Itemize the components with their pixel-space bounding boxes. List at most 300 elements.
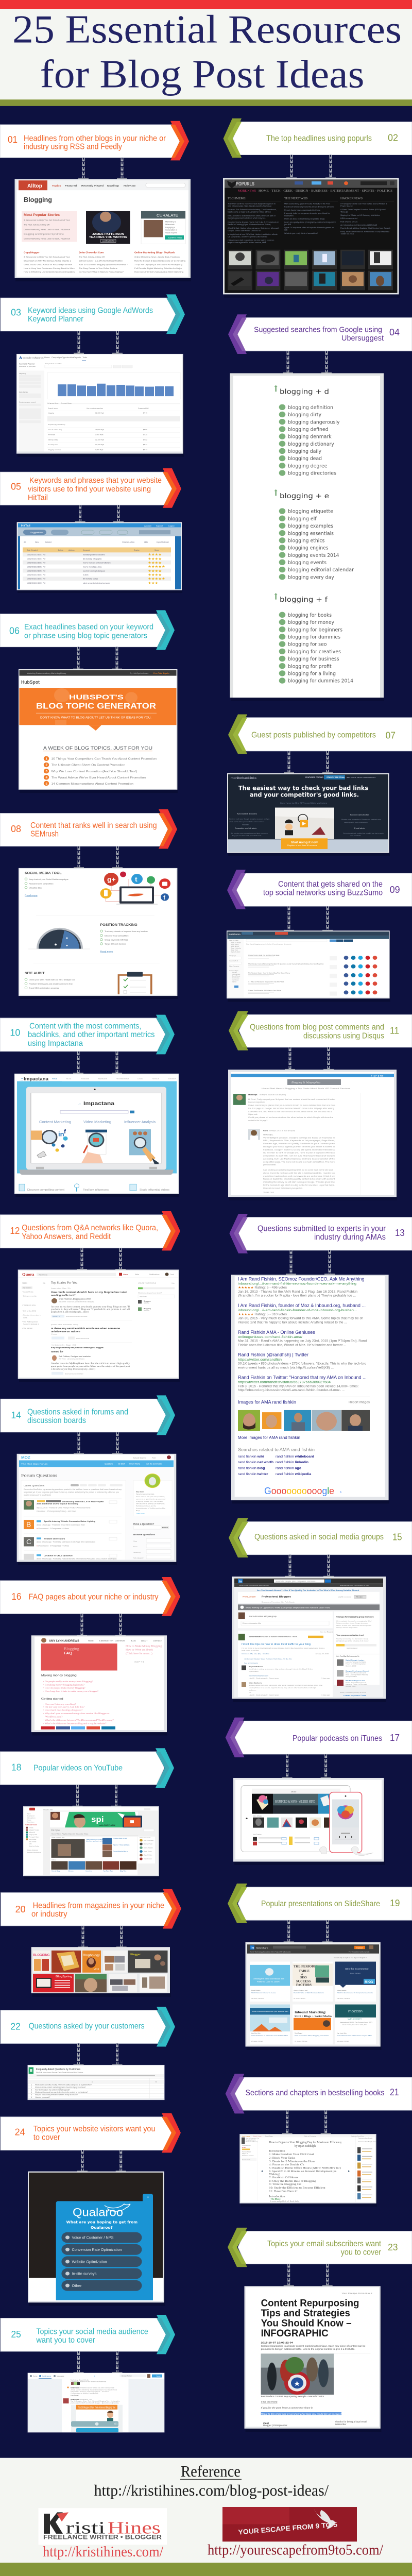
hubspot topics list: The Ultimate Cheat Sheet On Content Promotion [52, 764, 126, 767]
moz question list: Sep 22, 2015 - Posted by Chris Young in Feature Announcements [37, 1507, 91, 1509]
most popular stories: 3 Resources to Help You Get Smart about Your [24, 219, 71, 221]
keyword list: blogging + e: blogging events [288, 560, 327, 566]
moz blue bar: Questions [105, 1463, 113, 1465]
slideshare header [247, 1944, 379, 1954]
banner 02: The top headlines using popurls [266, 134, 372, 143]
twitter top nav [28, 2373, 164, 2379]
quora feed: If my blog is relatively new, how can I attract guest bloggers [51, 1347, 104, 1349]
ad: James Patterson: JAMES PATTERSON [92, 233, 124, 236]
second comment: competition: to start with. I am not sure what keyword research tool you [263, 1155, 335, 1157]
monitorbacklinks features: they get new links with your SEO tools [232, 835, 262, 837]
moz right sidebar: to sign up for Moz Pro. You can also [136, 1500, 163, 1502]
screen 02: popurls [223, 178, 400, 298]
impactana nav: TESTIMONIALS [116, 1078, 129, 1080]
kindle toolbar: Book Cover [253, 2136, 262, 2137]
ad: Curalate: Visual Buyers [165, 232, 177, 234]
blog top bar: f t g+ p rss [371, 1075, 384, 1078]
banner 13: industry during AMAs [314, 1233, 386, 1242]
magazine row 1: Blogger [130, 1953, 141, 1956]
title: for Blog Post Ideas [40, 52, 364, 96]
newsletter footer text: Blogger | Entrepreneur [263, 2424, 287, 2427]
linkedin right column: Asst. Learning Master Planning [346, 1674, 369, 1675]
quora feed: Downvote Comment Share [65, 1373, 83, 1375]
result 5: Feb 3, 2015 - Honored that my AMA on Inbound has been viewed 14,000+ times: [238, 1385, 359, 1388]
kindle right panel: Customers Also Bought Items [358, 2141, 376, 2143]
quora right column [138, 1282, 175, 1312]
result 2: I Am Rand Fishkin, founder of Moz & Inbound.org, husband ... [238, 1303, 366, 1309]
banner 05 [0, 468, 181, 508]
slideshare card 1: SEO Patterns to Love vs. Leave [251, 1992, 276, 1994]
kindle right panel: ▸ [348, 2170, 350, 2173]
hittail keywords table: ★★★★★ [148, 577, 165, 581]
buzzsumo search [246, 939, 353, 945]
slideshare card 6: International SEO & The Future of your SEO [340, 2022, 372, 2024]
banner 01 [0, 121, 189, 160]
linkedin right column: abuse. To read more about how we've improved [336, 1624, 371, 1626]
alltop columns: The Rich Jerk is Jerking Off [79, 256, 105, 258]
magazine row 2 [33, 1974, 167, 1992]
result 2: inbound.org/.../i-am-rand-fishkin-founder-of-moz-inbound-org-husban... [238, 1309, 357, 1312]
buzzsumo sidebar: Country/TLD [229, 960, 238, 962]
popurls columns: Rust in Detail: Writing Scalable Chat Service from Scratch [340, 227, 390, 229]
buzzsumo results [248, 954, 337, 996]
slideshare card 5: Inbound Marketing: [295, 2011, 327, 2014]
semrush site audit [25, 916, 160, 989]
banner 08: Content that ranks well in search using [30, 821, 157, 830]
moz right sidebar: comment, or give thumbs up, you need [136, 1498, 165, 1500]
screen 07: Monitor Backlinks [227, 773, 390, 856]
qualaroo question: What are you hoping to get from [66, 2220, 138, 2225]
popurls thumbnails row 1 [228, 250, 393, 269]
faq: getting started [41, 1697, 114, 1725]
banner 12: Questions from Q&A networks like Quora, [22, 1224, 158, 1232]
quora left column: • The Martian [22, 1327, 32, 1329]
banner 16: FAQ pages about your niche or industry [29, 1592, 159, 1601]
buzzsumo results: The Absolute Guide - How To Start a Blog That Makes Money [248, 972, 290, 974]
adwords sidebar: Customize your search [19, 401, 36, 403]
banner 22: 22 [10, 2022, 21, 2032]
hittail keywords table: ★★★★ [148, 561, 162, 565]
monitorbacklinks features: backlinks [242, 824, 249, 825]
linkedin start discussion: Enter a discussion title [243, 1622, 261, 1624]
impactana nav [20, 1076, 176, 1082]
popurls columns: just $29 [284, 224, 291, 226]
sheets rows: What analytics would you use to develop better content for my business? [35, 2091, 88, 2093]
result 1: @randfish. I'm a sucker for Maptia - love their plans :-) They're probably too ... [238, 1294, 356, 1298]
screen 17: iTunes on iPad and iPod [233, 1778, 385, 1865]
popurls columns: TECHMEME [228, 197, 246, 200]
popurls columns: Power Source [340, 205, 353, 207]
banner 05: HitTail [28, 494, 48, 502]
youtube related channels: Rand Fishkin [144, 1854, 152, 1856]
youtube sidebar: Watch Later [27, 1821, 35, 1823]
popurls columns: Filthy, Mean and Powerful: How Donald Trump Mastered [340, 231, 389, 232]
banner 23: Topics your email subscribers want [267, 2240, 381, 2248]
second comment: much time tracking how well my keywords are performing. I think if we [263, 1175, 335, 1177]
hittail keywords table: Deleted [45, 541, 52, 543]
hittail keywords table: Actions [68, 549, 75, 551]
banner 09: Content that gets shared on the [278, 880, 383, 889]
newsletter headline: INFOGRAPHIC [261, 2328, 329, 2338]
banner 15: Questions asked in social media groups [254, 1533, 384, 1541]
hubspot orange hero: BLOG TOPIC GENERATOR [36, 702, 156, 710]
youtube sidebar: Just Trends [29, 1841, 37, 1843]
linkedin posts: I'm not trying to be an internationally known blogger, but I'd like how to find local readers and draw a [242, 1647, 324, 1649]
ad: Curalate: Marketing to [165, 221, 176, 223]
slideshare header: SlideShare [256, 1946, 268, 1949]
keyword list: blogging + d [274, 385, 339, 476]
kindle book text: 5: Establish Home Office Hours (Allow NOBODY in!) [269, 2166, 341, 2170]
moz right sidebar: Participate in Q&A, and by [136, 1505, 156, 1507]
moz right sidebar: Hey there! [136, 1491, 144, 1493]
banner 21: 21 [390, 2088, 399, 2098]
popurls columns: merger agreement with Dell, which may be... [228, 217, 266, 219]
quora top bar: Notifications [149, 1274, 160, 1276]
amy lynn nav: E-NEWSLETTER [99, 1640, 114, 1642]
slideshare header: Home Technology Education More Topics My Clipboards [250, 1951, 291, 1953]
kindle left panel: Maximum Efficiency [246, 2141, 259, 2143]
ad: Curalate: LEARN NOW [168, 236, 182, 239]
popurls columns: Pixels all about to start taking 3D printed drugs [284, 218, 325, 220]
keyword list: blogging + d: blogging dead [288, 456, 322, 462]
keyword list: blogging + e: blogging elf [288, 516, 317, 522]
alltop columns: Good, Good, Good Advice for Recording Interview [24, 263, 72, 265]
popurls columns: In-depth look at how EU's Safe Harbor invalidation affects [228, 233, 278, 235]
banner 23: 23 [388, 2243, 398, 2253]
twitter feed column: Marketing · Social Media [71, 2379, 89, 2381]
alltop nav: Topics [52, 184, 61, 188]
result 1: I Am Rand Fishkin, SEOmoz Founder/CEO, Ask Me Anything [238, 1277, 365, 1282]
banner 04: Ubersuggest [341, 334, 384, 343]
monitorbacklinks headline: Must have tool for SEOs and Web Marketers [280, 802, 328, 805]
hubspot topics list: 2 [45, 764, 48, 767]
hubspot top bar: Try HubSpot software [130, 672, 149, 674]
quora left column [22, 1282, 45, 1329]
twitter feed column: Like Social [71, 2395, 79, 2397]
hittail keywords table: ★★★★ [148, 573, 162, 577]
earbuds [319, 1846, 373, 1856]
slideshare card 5 [293, 2005, 333, 2044]
impactana screen content: Video Marketing [83, 1120, 111, 1124]
banner 09: top social networks using BuzzSumo [263, 888, 383, 897]
banner 03: Keyword Planner [28, 314, 84, 324]
hittail keywords table: 10/02/2015 2:50:51 PM [27, 558, 46, 560]
screen 11: blog comments [228, 1070, 397, 1200]
moz question list: responses yet. If your response gets three thumbs up, marked as helpful by the poster, or endorsed by a Mozzer, you [24, 1492, 119, 1494]
keyword list: blogging + d: blogging definition [288, 404, 333, 411]
moz forum heading: Forum Questions [21, 1473, 58, 1478]
hittail keywords table: how to monetize a blog [83, 566, 101, 568]
quora feed: As soon as you have content, you should promote your blog. Blogs are not "If [51, 1306, 130, 1308]
twitter feed column: Contributor, Tagged me as Twitter Lists/Hashtags [71, 2381, 107, 2383]
keyword list: blogging + f: blogging for dummies 2014 [288, 678, 353, 684]
youtube sidebar: My Channel [27, 1815, 35, 1817]
result 3: Mar 31, 2015 - Rand's AMA is happening on July 23rd, 2015 (1pm PT/4pm Est). Rand [238, 1340, 367, 1343]
buzzsumo sidebar: Past Month [231, 945, 239, 947]
linkedin right column: participants get all the full value of all of your. [336, 1640, 369, 1642]
qualaroo options: Voice of Customer / NPS [72, 2235, 114, 2240]
slideshare card 4: Good Practices to Maximize your Website SEO [252, 2010, 288, 2012]
hubspot orange hero [20, 688, 176, 731]
adwords results table: $6.71 [143, 444, 147, 446]
monitorbacklinks button: Register in less than 30 seconds [287, 844, 317, 846]
result 4: environment hurts us all so much (via http://t.co/aesYeGjX8) ... [238, 1366, 334, 1370]
semrush site audit: Track SEO optimization progress [29, 987, 59, 989]
slideshare card 5: TechTarget [295, 2032, 302, 2034]
slideshare card 3: SEO for Ecommerce: A Comprehensive Guide [337, 1992, 373, 1994]
result 2: ★★★★★ Rating: 5 - 310 votes [238, 1312, 287, 1316]
adwords search: Keyword Planner [19, 363, 35, 365]
linkedin top bar: in [238, 1580, 242, 1583]
twitter top nav: Tweet [156, 2375, 161, 2377]
keyword list: blogging + d: blogging + d [280, 388, 329, 396]
screen 10: Impactana [14, 1074, 179, 1197]
linkedin posts: January 26, 2015 [315, 1653, 329, 1655]
monitorbacklinks features: rankings with your competitors [344, 821, 368, 823]
newsletter footer text [261, 2395, 367, 2427]
slideshare card 3 [335, 1962, 376, 2002]
kindle left panel: Blogging Day for [246, 2139, 256, 2141]
chains 15 [285, 1555, 334, 1577]
slideshare card 1 [250, 1962, 290, 2002]
sheets rows: 3 [31, 2089, 32, 2091]
chains 21 [282, 2110, 331, 2134]
keyword list: blogging + f: blogging for seo [288, 641, 327, 648]
moz question list: about 4 hours ago · Posted by Federal Benefits Informational Advocates (SEO, Search Strategies) [37, 1558, 116, 1560]
alltop columns: 7 Tips For Deploying a Successful Ad Retargeting [134, 263, 182, 265]
linkedin start discussion: Start a discussion with your group [249, 1616, 277, 1618]
slideshare card 5: SEO + Blogs + Social Media [295, 2015, 332, 2018]
ipad: Music [291, 1791, 297, 1793]
keyword list: blogging + f: blogging for a living [288, 671, 336, 676]
twitter feed column: youtescapefrom9to5.com/top-26-blogger... @youtstream @pankaj [71, 2402, 118, 2404]
moz right sidebar: Sub-category [133, 1557, 144, 1559]
chains 25 [73, 2351, 123, 2373]
kindle book text: by Ryan Biddulph [295, 2144, 316, 2148]
linkedin posts: Engage people from your community, offer social "rewards" for sharing your pitches, go on local [249, 1684, 322, 1686]
banner 24: to cover [33, 2133, 60, 2142]
banner 07 [228, 715, 412, 754]
quora top bar: Quora [22, 1272, 35, 1277]
reference url: http://kristihines.com/blog-post-ideas/ [94, 2482, 329, 2499]
linkedin right column: Ads You May Be Interested In [336, 1655, 359, 1657]
quora feed: Downvote Comments 30 Share [66, 1315, 88, 1317]
ipad albums [253, 1815, 331, 1845]
quora right column: UPDATE YOUR PROFILE [138, 1282, 156, 1284]
semrush social media tool text: Keep track of your Social Media campaigns [29, 878, 68, 880]
second comment: I am working on articles regarding SEO, so do come back to the site and [263, 1169, 333, 1171]
youtube header: blogging bad [43, 1808, 53, 1810]
second comment: green the better. [263, 1164, 277, 1166]
buzzsumo sidebar [228, 939, 244, 997]
youtube sidebar: Wish List Online [29, 1845, 40, 1848]
youtube related channels: Amy Porterfield [144, 1839, 154, 1841]
moz question list: B [26, 1521, 31, 1528]
youtube sidebar: History [27, 1819, 31, 1821]
youtube video list: Demos [68, 1870, 74, 1872]
logo: Your Escape From 9 to 5: YOUR ESCAPE FROM 9 TO 5 [238, 2521, 338, 2536]
slideshare card 2: of [301, 1974, 303, 1976]
linkedin group header [238, 1592, 380, 1603]
qualaroo logo: Qualaroo [73, 2206, 123, 2219]
slideshare header: Upload [356, 1947, 363, 1949]
keyword list: blogging + e: blogging every day [288, 574, 334, 580]
keyword list: blogging + f: blogging for dummies [288, 634, 340, 640]
kindle book text: The Blaze [270, 2198, 281, 2200]
banner 01: industry using RSS and Feedly [24, 142, 123, 151]
amy lynn side links: (Click here for more...) [126, 1652, 152, 1655]
popurls columns: Three.js) [340, 211, 348, 213]
hittail keywords table [23, 541, 171, 585]
second comment: focus on backlinks, providing quality content & be smart with content [263, 1178, 335, 1180]
popurls columns: Twitter for 2016 [340, 233, 354, 235]
adwords header: Reports [74, 357, 81, 359]
newsletter footer text: Reply to this email and let us know what topic you would like us to cover! [261, 2413, 341, 2416]
related searches [238, 1447, 315, 1476]
alltop columns: Rule the School: 3 Essential Lessons on Co-Creating [134, 260, 185, 262]
adwords results table: blogging websites [48, 449, 61, 451]
popurls columns: Google, others saw Model Clauses for [228, 230, 261, 232]
moz right sidebar [133, 1474, 172, 1559]
hittail keywords table: ★★★★ [148, 557, 162, 561]
popurls columns: THE NEXT WEB [284, 197, 307, 200]
quora top bar: Home [123, 1274, 128, 1276]
screen 14: Moz Q&A forum [17, 1454, 177, 1565]
moz right sidebar: Sorted by [133, 1551, 141, 1553]
youtube sidebar: Home [27, 1813, 31, 1815]
second comment: Hi Monidipa, [263, 1134, 273, 1136]
banner 06 [0, 610, 175, 650]
moz question list: Announcing Multiseat 1.0 for Moz Pro (aka [62, 1500, 104, 1503]
keyword list: blogging + f: blogging for creatives [288, 649, 341, 655]
adwords results table: Keyword ideas [61, 402, 72, 404]
sheets rows: 6 [31, 2096, 32, 2098]
adwords results table: 1,900 High [95, 449, 104, 451]
semrush social icons: t [135, 876, 138, 883]
second comment: competition page. The more red means too much competition. The more [263, 1161, 335, 1163]
banner 10: using Impactana [28, 1039, 83, 1048]
slideshare card 2: Search Engine Land [294, 1990, 307, 1991]
magazine row 1: Bloghology [83, 1954, 100, 1957]
chains 14 [74, 1432, 123, 1454]
linkedin posts: 3 days ago [321, 1694, 330, 1696]
sheets rows: What are some content marketing goals I should be trying to achieve? [35, 2087, 86, 2089]
hittail keywords table: 10/02/2015 2:50:51 PM [27, 570, 46, 572]
result 4: https://twitter.com/randfish [238, 1358, 282, 1362]
keyword list: blogging + d: blogging directories [288, 470, 336, 476]
impactana illustration: content: in [58, 1131, 64, 1138]
keyword list: blogging + e: blogging ethics [288, 538, 324, 544]
faq: making money blogging: • Do people really make money from Blogging? [43, 1681, 93, 1683]
youtube sidebar: KTB [29, 1843, 32, 1845]
linkedin right column [334, 1612, 380, 1697]
monitorbacklinks button: Start using it now [291, 841, 318, 844]
result 4: Rand Fishkin (@randfish) | Twitter [238, 1352, 309, 1358]
youtube sidebar: Browse channels [27, 1849, 38, 1851]
banner 22: Questions asked by your customers [29, 2022, 145, 2030]
quora feed: How much content should I have on my blog before I start [51, 1291, 127, 1294]
linkedin top bar: Search for people, jobs, companies, and more... [276, 1581, 317, 1582]
result 1 [238, 1277, 365, 1298]
alltop heading: Blogging [24, 196, 52, 204]
popurls columns: China issues draft regulations for ride hailing services, [228, 240, 274, 242]
reference heading: Reference [181, 2463, 241, 2480]
result 3: Rand Fishkin AMA - Online Geniuses [238, 1330, 315, 1335]
linkedin posts: etc [249, 1691, 251, 1693]
qualaroo question [66, 2220, 138, 2230]
slideshare card 6: WELCOME! [348, 2018, 362, 2021]
alltop columns: How Does Intertice's Nana Abada Meet Marketing [134, 270, 183, 273]
banner 03 [1, 294, 185, 334]
quora feed: Question asked · Social Media · 30 Sep [51, 1324, 78, 1326]
linkedin posts: Milan Stankovic [249, 1682, 262, 1684]
amy lynn nav: CONTACT [153, 1640, 162, 1642]
chains 09 [284, 906, 333, 930]
kindle book text: 4: Focus on the Double C's [269, 2163, 304, 2166]
popurls columns: new Chromecasts (Sam MacNeuron/Ars Technica) [228, 205, 271, 207]
quora feed: 750 Views · Upvoted by Jean Shapira [59, 1358, 84, 1360]
ad: Curalate: Millennials: [165, 224, 175, 226]
youtube related channels: Michael Hyatt [144, 1843, 152, 1845]
youtube sidebar: Allegory Hall [29, 1834, 37, 1836]
linkedin group header: 12,275 members [338, 1596, 351, 1598]
newsletter footer text: Best Modern Content Repurposing example - Marvel Comics [261, 2395, 324, 2398]
screen 21: Kindle book preview [239, 2134, 377, 2207]
quora feed: Upvote | 78 [53, 1315, 61, 1317]
first comment: Could you please let me know what are the other factors for which Google will show the [248, 1116, 333, 1118]
moz blue bar: My Stuff [118, 1463, 125, 1465]
sheets rows: 2 [31, 2087, 32, 2089]
monitorbacklinks features: Auto backlink discovery [237, 813, 257, 815]
alltop columns: Brian Clark on Why Not Being a Techie May Be a [24, 260, 72, 262]
keyword list: blogging + f: blogging for profit [288, 664, 332, 669]
sheets rows [28, 2078, 164, 2099]
quora left column: • The Walking Dead [22, 1321, 38, 1323]
sheets rows: 4 [31, 2091, 32, 2093]
hittail keywords table: Hide [144, 541, 148, 543]
adwords header [19, 356, 87, 361]
banner 20: Headlines from magazines in your niche [33, 1901, 164, 1910]
screen 18: YouTube channel [23, 1806, 160, 1879]
related searches: rand fishkin age [276, 1467, 301, 1470]
magazine row 1: Vera [94, 1968, 99, 1971]
popurls columns: US companies, and three primary alternatives [228, 236, 267, 238]
screen 20: magazines [31, 1947, 171, 1997]
sheets title [29, 2067, 164, 2077]
chains 08 [74, 846, 123, 868]
youtube sidebar: SUBSCRIPTIONS [25, 1824, 37, 1826]
quora feed: guest posts from people in your niche. Make sure the subject of the guest post [51, 1365, 130, 1367]
popurls columns: 8 speedy, indie horror games to curdle your blood for [284, 212, 330, 214]
quora right column: Hide [171, 1282, 175, 1284]
banner 11: 11 [390, 1026, 399, 1036]
impactana feature row: Find key influencers [83, 1189, 109, 1192]
quora feed: unfollow me on Twitter? [51, 1330, 80, 1333]
youtube related channels: Marie Forleo [144, 1851, 152, 1852]
kindle toolbar: Settings Font Print [351, 2136, 364, 2137]
hittail keywords table: 10/02/2015 2:50:51 PM [27, 582, 46, 584]
alltop columns: Copyblogger [24, 251, 40, 254]
youtube video list: Tools Website How to [113, 1851, 128, 1852]
popurls columns: What do you really think of wearables? [284, 232, 318, 234]
monitorbacklinks button [281, 838, 328, 849]
logo: Kristi Hines [38, 2508, 167, 2545]
kindle right panel: ◂ [261, 2170, 263, 2173]
result 1: inbound.org/.../i-am-rand-fishkin-seomoz-founder-ceo-ask-me-anything [238, 1282, 356, 1286]
banner 05: visitors use to find your website using [28, 485, 151, 494]
second comment: So in order to rank in Google you have to pick a keyword with less [263, 1152, 335, 1154]
slideshare card 2: FACTORS [296, 1984, 312, 1987]
